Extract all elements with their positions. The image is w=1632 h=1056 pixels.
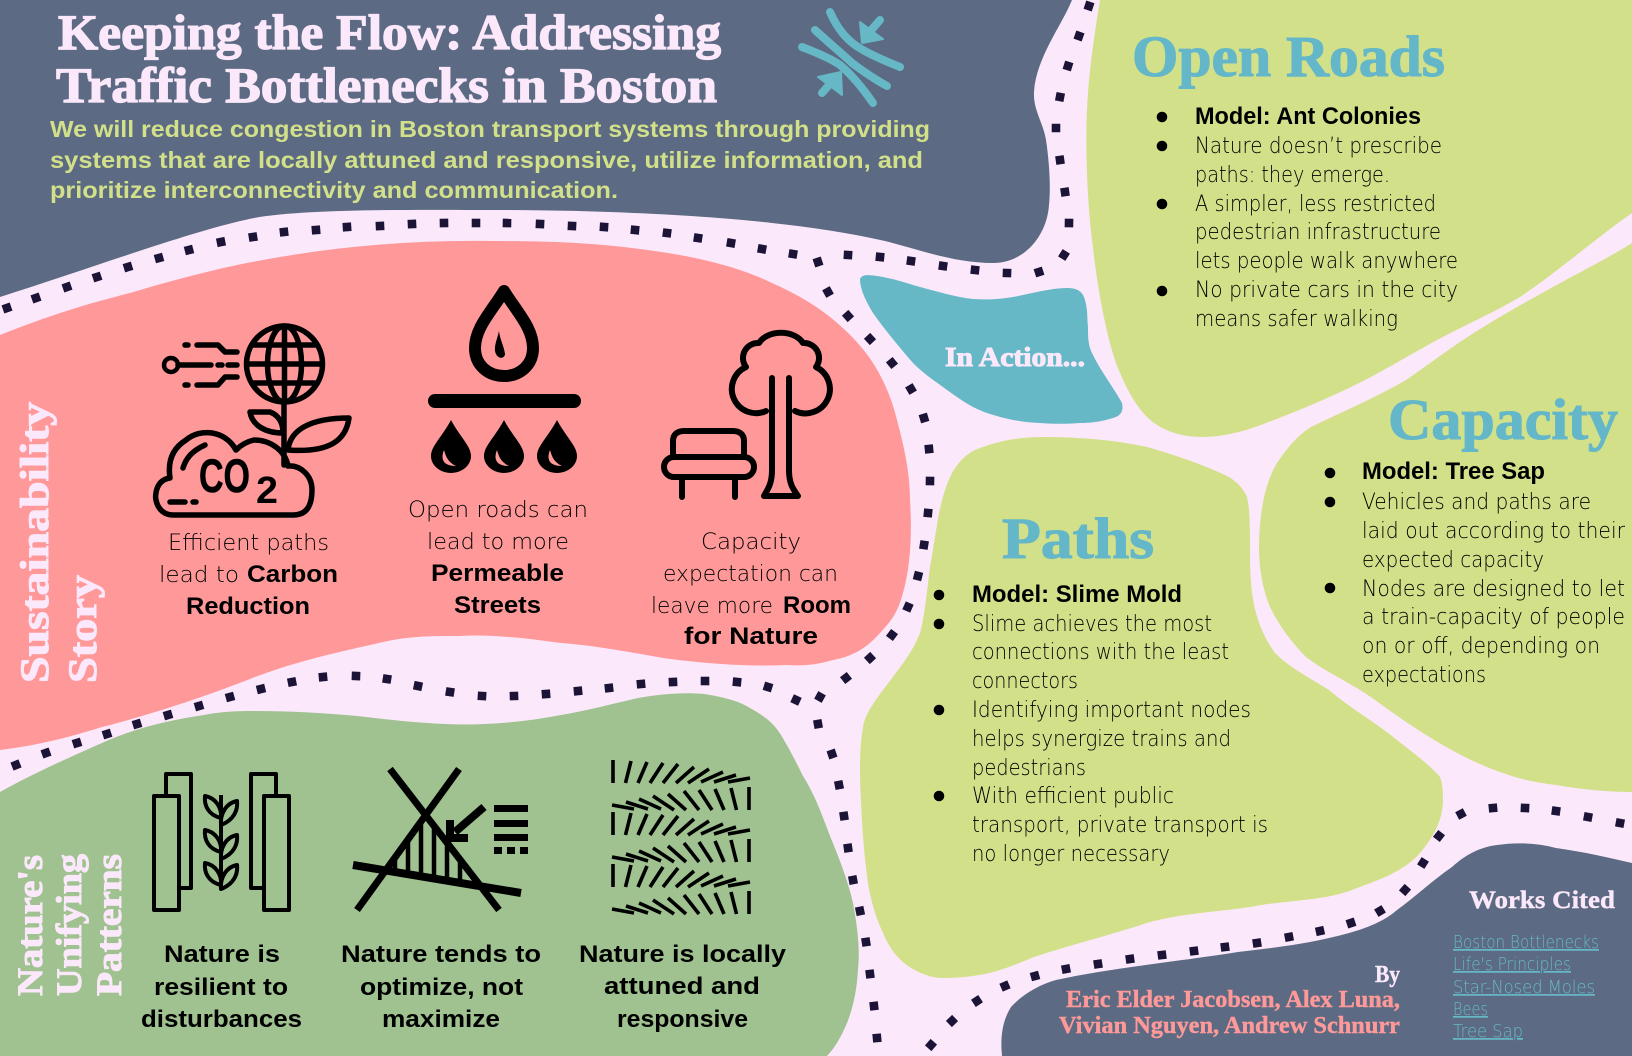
title [56,4,721,113]
text: locally attuned and responsive: Nature is locally [579,941,787,968]
text: permeable streets: Permeable [431,560,564,587]
list: capacity: on or off, depending on [1362,634,1600,659]
text: resilient to disturbances: resilient to [154,974,288,1001]
list: paths: Identifying important nodes [972,698,1251,723]
list: open roads: means safer walking [1195,307,1398,332]
list: citations: Tree Sap [1453,1022,1523,1042]
panel: nature's unifying patterns [0,693,859,1056]
icon: locally attuned pattern [612,760,750,914]
list: open roads: lets people walk anywhere [1195,249,1458,274]
text: room for nature: expectation can [663,562,838,587]
text: permeable streets: lead to more [427,530,569,555]
title: Traffic Bottlenecks in Boston [56,57,717,113]
list: paths: transport, private transport is [972,813,1268,838]
subtitle statement: systems that are locally attuned and responsive, utilize information, and [50,147,923,173]
credits: authors: Vivian Nguyen, Andrew Schnurr [1059,1013,1400,1039]
list: paths: Slime achieves the most [972,612,1212,637]
panel: paths [860,437,1443,978]
title: Keeping the Flow: Addressing [58,4,721,60]
list: paths: helps synergize trains and [972,727,1231,752]
text: resilient to disturbances: Nature is [164,941,280,968]
list: citations: Life's Principles [1453,955,1571,975]
text: locally attuned and responsive [579,941,787,1033]
heading: open roads: Open Roads [1132,24,1445,89]
icon: optimize triangle [353,769,528,910]
list: open roads: paths: they emerge. [1195,163,1390,188]
list: citations: Bees [1453,1000,1488,1020]
list: citations [1453,933,1599,1042]
list: paths [934,581,1268,867]
list: capacity [1325,458,1626,688]
text: optimize not maximize: optimize, not [360,974,523,1001]
panel: sustainability story [0,241,911,750]
list: paths: connections with the least [972,640,1229,665]
icon: tree and bench [664,333,830,497]
list: open roads [1157,103,1458,332]
subtitle statement: prioritize interconnectivity and communication. [50,177,618,203]
text: carbon reduction: lead to [159,563,239,588]
list: open roads: Model: Ant Colonies [1195,103,1421,130]
text: room for nature: for Nature [684,623,818,650]
list: paths: no longer necessary [972,842,1170,867]
list: paths: connectors [972,669,1078,694]
heading: paths: Paths [1002,506,1154,571]
heading: nature's unifying patterns: Nature's [10,855,50,996]
panel: header background [0,0,1072,297]
list: open roads: No private cars in the city [1195,278,1458,303]
heading: sustainability story [12,402,105,683]
text: carbon reduction: Efficient paths [168,531,329,556]
text: optimize not maximize: Nature tends to [341,941,541,968]
text: optimize not maximize: maximize [382,1006,500,1033]
text: resilient to disturbances: disturbances [141,1006,302,1033]
text: carbon reduction: Carbon [247,561,338,588]
icon: bottleneck arrows [802,12,900,103]
label: in action: In Action... [945,342,1085,372]
list: open roads: pedestrian infrastructure [1195,220,1441,245]
list: citations: Boston Bottlenecks [1453,933,1599,953]
credits: authors [1059,962,1400,1039]
text: room for nature: Room [783,592,851,619]
heading: nature's unifying patterns: Unifying [49,854,89,996]
heading: works cited: Works Cited [1469,887,1615,914]
heading: sustainability story: Sustainability [12,402,57,683]
text: permeable streets: Streets [454,592,541,619]
heading: nature's unifying patterns [10,854,129,996]
icon: resilient plant between pillars [154,774,289,910]
list: paths: Model: Slime Mold [972,581,1182,608]
list: citations: Star-Nosed Moles [1453,978,1595,998]
heading: sustainability story: Story [60,575,105,683]
list: capacity: expected capacity [1362,548,1544,573]
panel: capacity [1259,243,1632,792]
list: paths: pedestrians [972,756,1086,781]
list: open roads: Nature doesn’t prescribe [1195,134,1442,159]
icon: CO2 globe flower: CO [199,449,250,502]
text: optimize not maximize [341,941,541,1033]
subtitle statement [50,116,930,203]
heading: nature's unifying patterns: Patterns [89,854,129,996]
text: room for nature [651,530,851,650]
panel: open roads [1086,0,1632,437]
icon: CO2 globe flower: 2 [256,470,278,512]
text: room for nature: Capacity [701,530,801,555]
text: carbon reduction: Reduction [186,593,310,620]
credits: authors: By [1375,962,1400,988]
list: capacity: expectations [1362,663,1486,688]
text: carbon reduction [159,531,338,620]
heading: capacity: Capacity [1388,387,1618,452]
text: resilient to disturbances [141,941,302,1033]
panel: in action [860,275,1123,424]
list: open roads: A simpler, less restricted [1195,192,1436,217]
list: paths: With efficient public [972,784,1174,809]
list: capacity: Vehicles and paths are [1362,490,1591,515]
list: capacity: Model: Tree Sap [1362,458,1545,485]
panel: footer credits background [1001,843,1632,1056]
icon: water drops permeable street [428,291,581,473]
credits: authors: Eric Elder Jacobsen, Alex Luna, [1066,987,1400,1013]
text: permeable streets: Open roads can [408,498,588,523]
text: permeable streets [408,498,588,619]
text: locally attuned and responsive: attuned and [604,973,760,1000]
icon: CO2 globe flower [156,326,349,515]
text: locally attuned and responsive: responsive [617,1006,748,1033]
text: room for nature: leave more [651,594,773,619]
subtitle statement: We will reduce congestion in Boston transport systems through providing [50,116,930,142]
